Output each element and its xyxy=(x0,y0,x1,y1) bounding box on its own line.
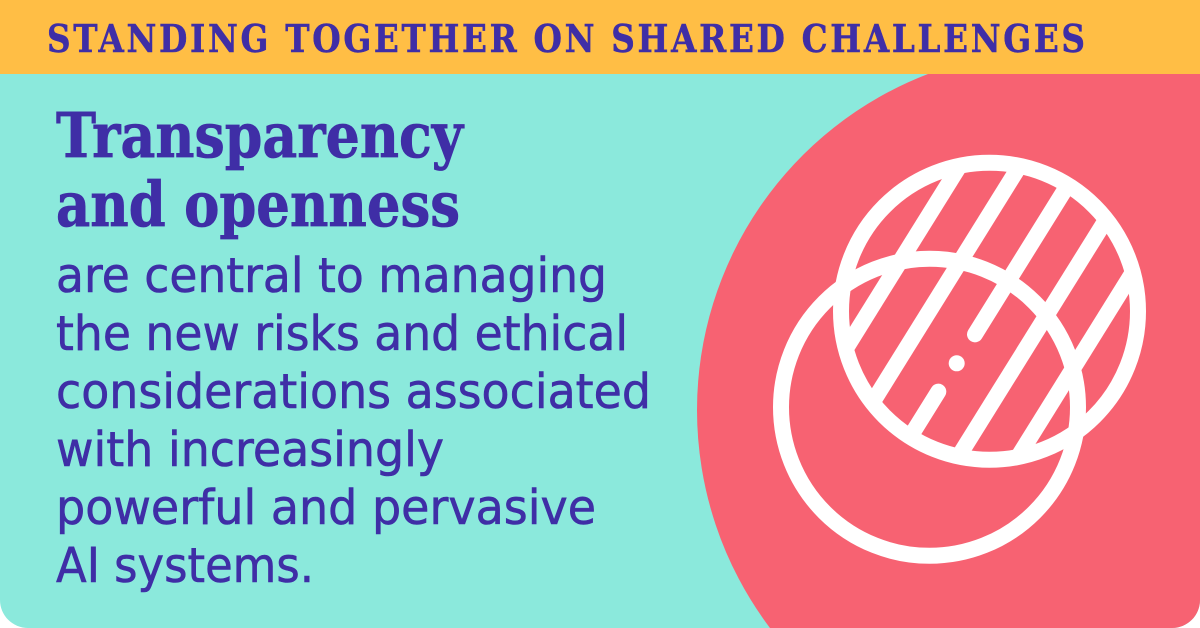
centre dot xyxy=(949,355,965,371)
body text: AI systems. xyxy=(56,538,314,594)
body text xyxy=(56,248,651,594)
body text: the new risks and ethical xyxy=(56,306,628,362)
body text: are central to managing xyxy=(56,248,607,304)
body text: with increasingly xyxy=(56,422,444,478)
upper circle xyxy=(841,163,1138,460)
body text: considerations associated xyxy=(56,364,651,420)
body text: powerful and pervasive xyxy=(56,480,596,536)
icon: two overlapping circles with diagonal stripes xyxy=(781,160,1140,556)
banner: yellow header strip xyxy=(0,0,1200,74)
heading xyxy=(56,99,465,241)
heading: Transparency xyxy=(56,99,465,172)
diagonal stripes xyxy=(850,172,1129,451)
red circle backdrop xyxy=(697,74,1200,628)
heading: and openness xyxy=(56,168,460,241)
banner title: STANDING TOGETHER ON SHARED CHALLENGES xyxy=(47,18,1085,62)
lower circle xyxy=(781,259,1078,556)
